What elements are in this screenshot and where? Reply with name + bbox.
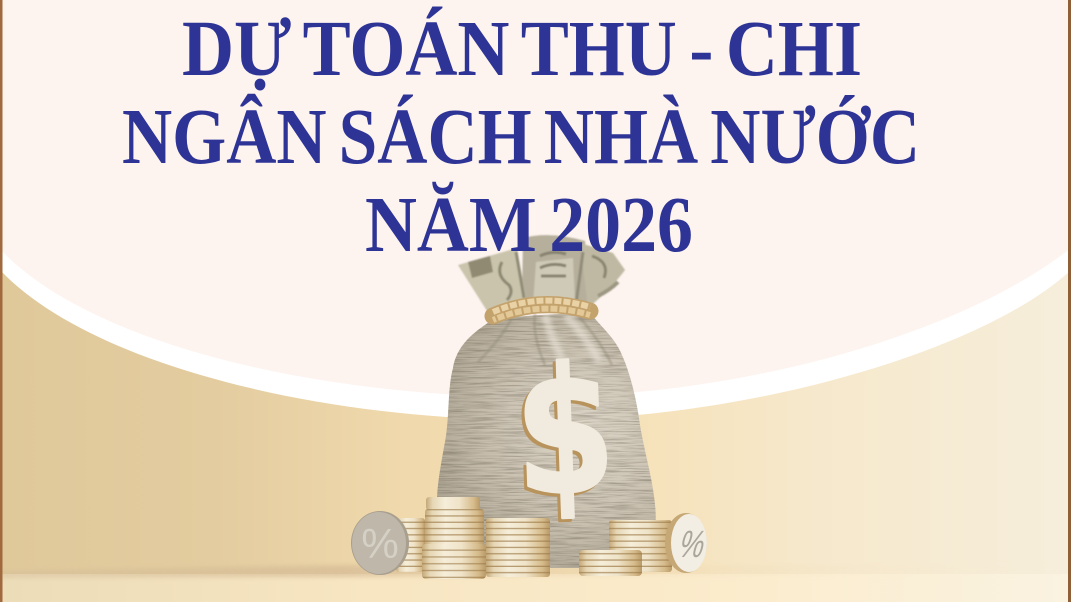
title line 1: DỰ TOÁN THU - CHI xyxy=(182,6,862,93)
front coin stack xyxy=(579,550,642,576)
background: floor xyxy=(0,574,1071,602)
right border xyxy=(1068,0,1071,602)
bag body xyxy=(437,312,656,568)
illustration: coins left xyxy=(351,497,550,579)
back coin stack xyxy=(425,497,484,547)
banknotes at top of bag xyxy=(458,235,625,322)
middle coin stack xyxy=(486,518,550,577)
illustration: money bag with dollar sign xyxy=(437,235,656,568)
front coin stack xyxy=(422,544,486,579)
back coin stack xyxy=(609,520,672,572)
rope tie xyxy=(493,301,590,320)
white curved band xyxy=(0,0,1071,420)
percent coin, left xyxy=(351,511,409,575)
coin stack behind percent coin xyxy=(396,518,425,572)
dollar sign: $ xyxy=(512,329,618,535)
percent coin, left: % xyxy=(361,520,399,567)
pink header area xyxy=(0,0,1071,397)
bag fold highlights xyxy=(545,314,600,362)
bag folds xyxy=(478,312,612,365)
illustration: coins right xyxy=(579,513,711,576)
title line 3: NĂM 2026 xyxy=(365,182,693,269)
left border xyxy=(0,0,2,602)
dollar sign: $ xyxy=(509,332,615,538)
percent coin, right: % xyxy=(674,523,711,566)
background: floor horizon shadow xyxy=(0,565,1071,578)
title line 2: NGÂN SÁCH NHÀ NƯỚC xyxy=(122,94,920,181)
title xyxy=(122,6,920,269)
